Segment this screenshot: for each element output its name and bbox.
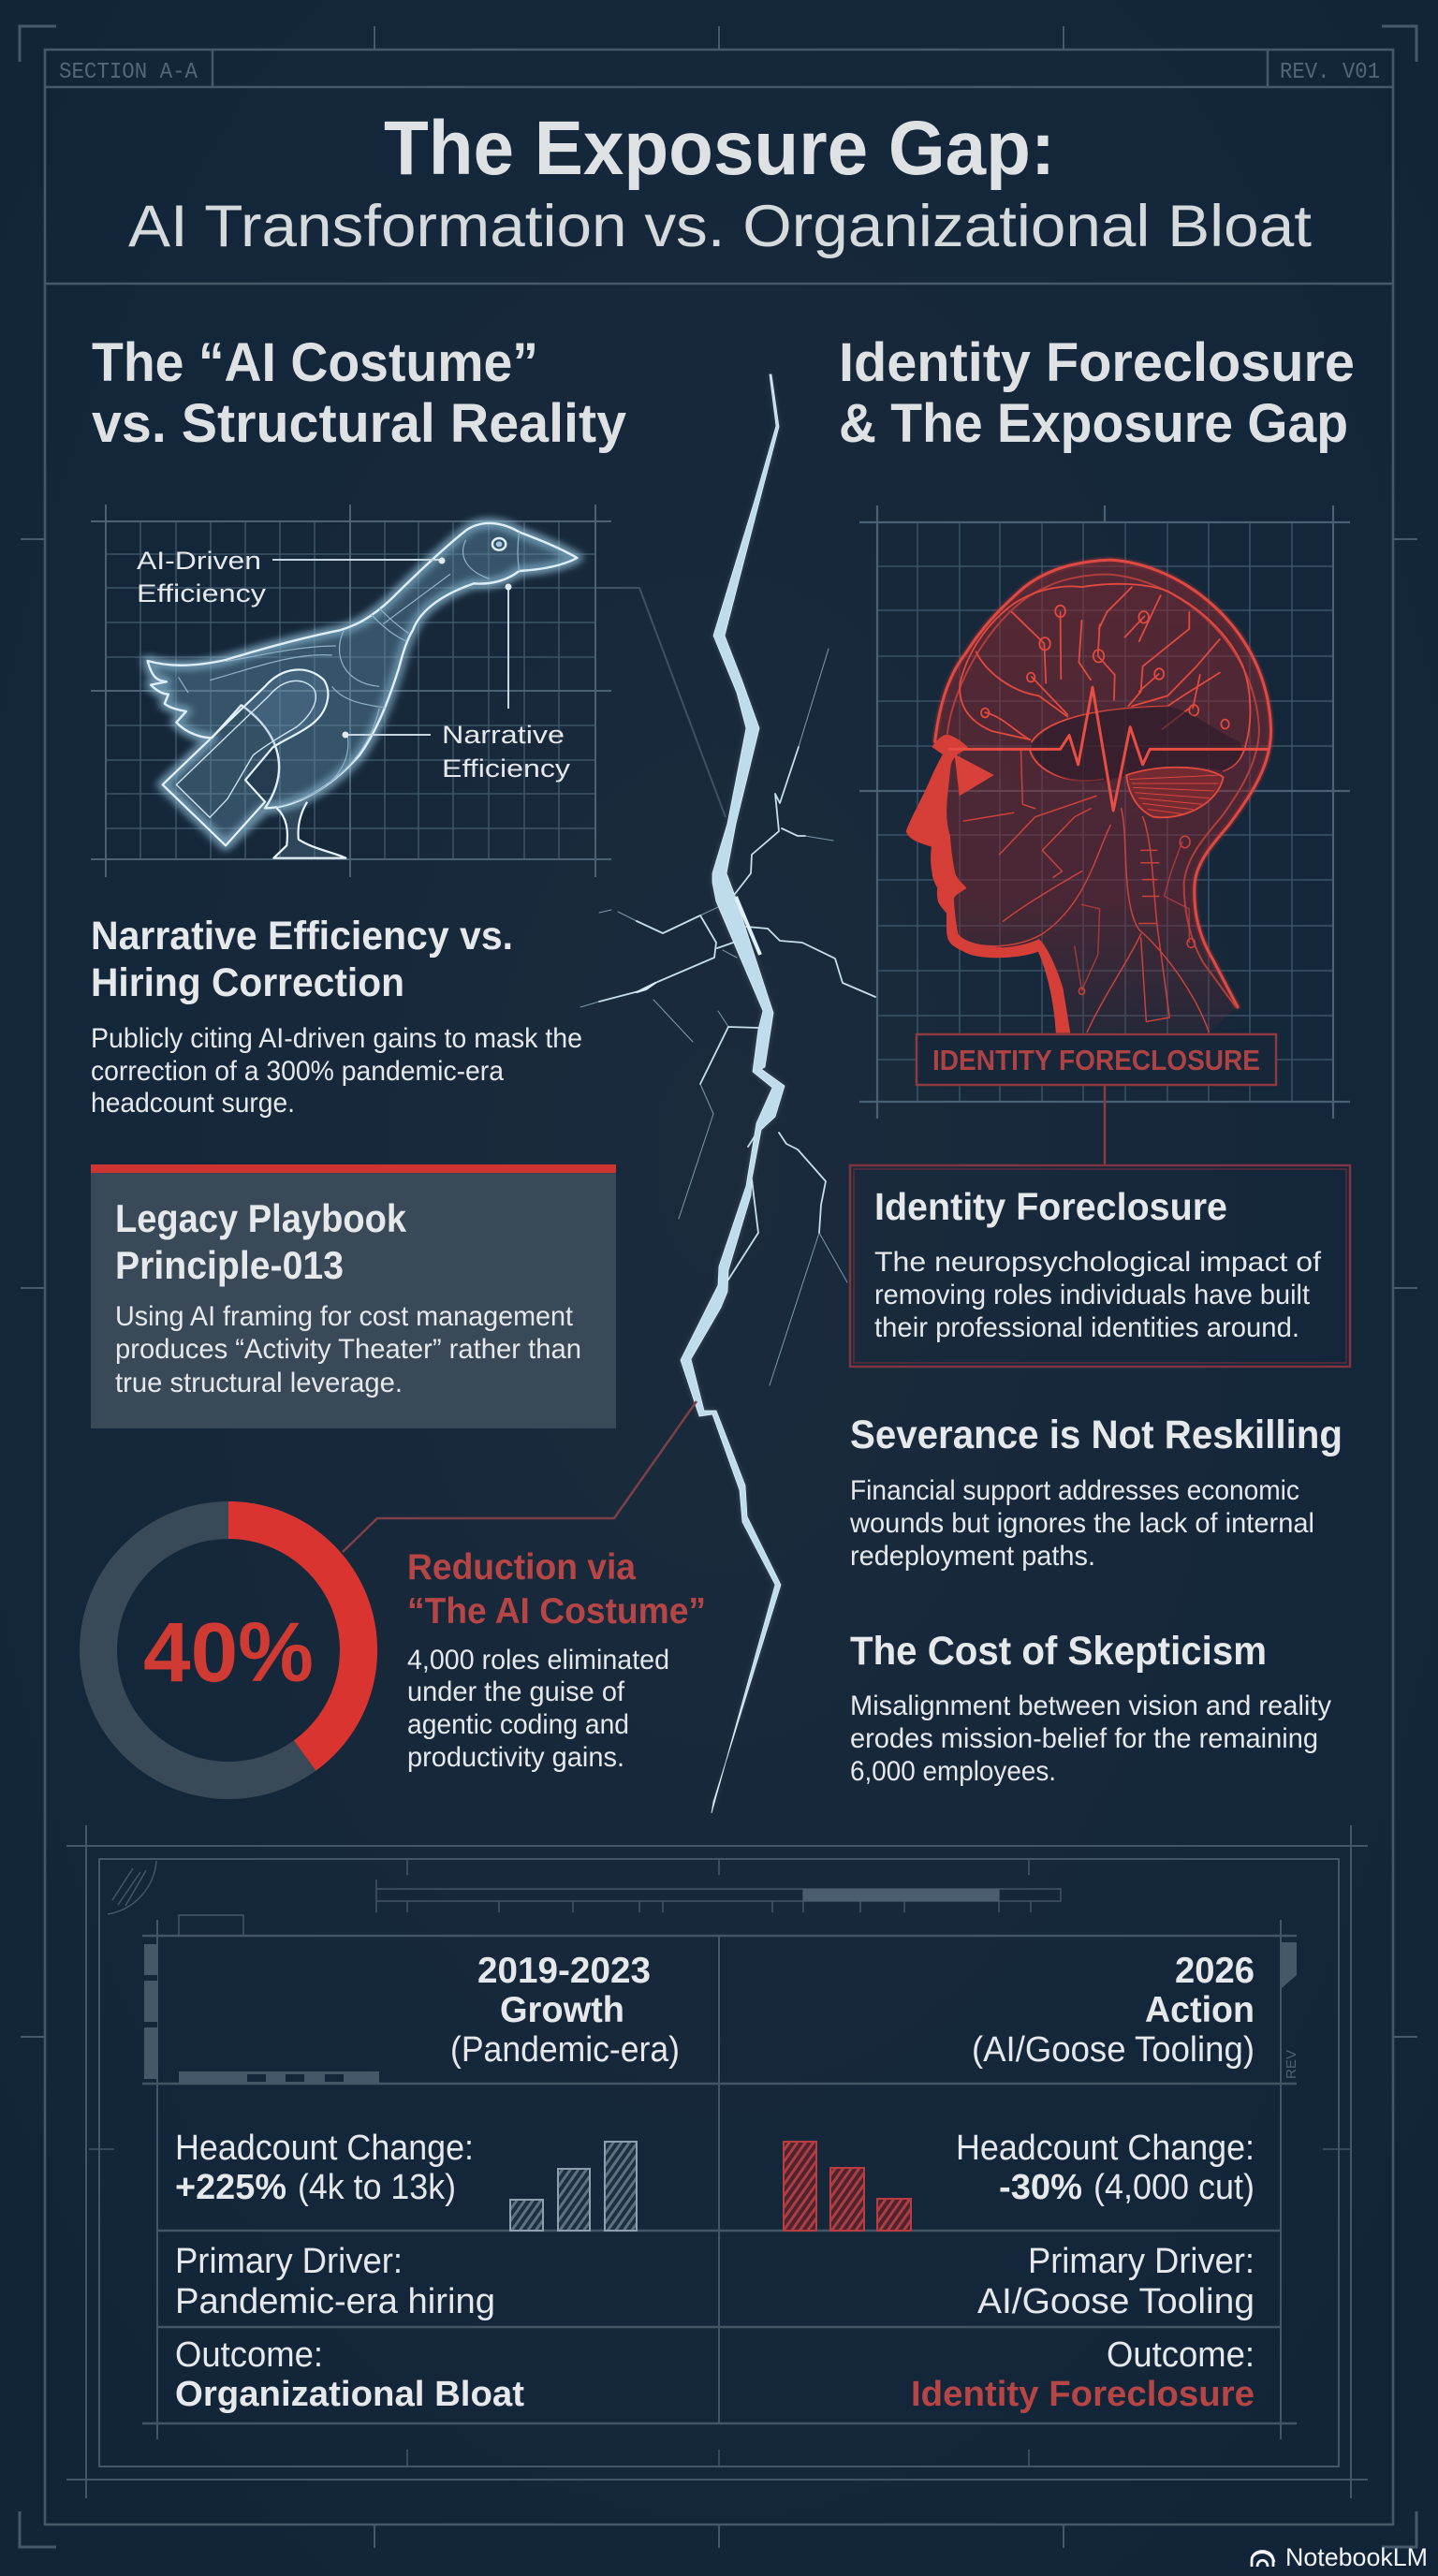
text block: narrative efficiency: correction of a 300% pandemic-era xyxy=(91,1056,504,1087)
goose blueprint diagram xyxy=(91,505,611,877)
text block: the cost of skepticism: The Cost of Skepticism xyxy=(850,1629,1267,1674)
row: primary driver right xyxy=(977,2242,1255,2321)
text block: reduction via the AI costume: 4,000 roles eliminated xyxy=(407,1645,669,1676)
text block: the cost of skepticism: erodes mission-belief for the remaining xyxy=(850,1723,1318,1754)
title: The Exposure Gap: xyxy=(384,106,1055,191)
margin label: REV xyxy=(1284,2050,1299,2079)
panel: identity foreclosure: their professional identities around. xyxy=(874,1312,1299,1343)
text block: severance is not reskilling: Severance is Not Reskilling xyxy=(850,1412,1343,1457)
panel: identity foreclosure: Identity Foreclosure xyxy=(874,1185,1227,1228)
left section heading: The “AI Costume” xyxy=(92,332,538,393)
icon: red head with brain circuit xyxy=(907,560,1271,1032)
text block: reduction via the AI costume: productivity gains. xyxy=(407,1742,624,1773)
crack branches xyxy=(580,649,875,1385)
row: headcount change right: (4,000 cut) xyxy=(1093,2168,1255,2207)
table blueprint frame xyxy=(66,1825,1368,2548)
row: primary driver right: AI/Goose Tooling xyxy=(977,2282,1255,2321)
column header: 2019-2023 growth: (Pandemic-era) xyxy=(450,2030,680,2070)
panel: legacy playbook xyxy=(91,1164,616,1428)
text block: severance is not reskilling: Financial support addresses economic xyxy=(850,1475,1299,1506)
row: primary driver left: Primary Driver: xyxy=(175,2242,403,2281)
row: outcome left xyxy=(175,2335,524,2414)
bar chart: reduction xyxy=(784,2142,911,2231)
text block: narrative efficiency: headcount surge. xyxy=(91,1088,295,1119)
row: outcome right: Outcome: xyxy=(1107,2335,1255,2375)
label: identity foreclosure: IDENTITY FORECLOSURE xyxy=(932,1044,1260,1076)
row: primary driver right: Primary Driver: xyxy=(1028,2242,1255,2281)
text block: reduction via the AI costume: agentic coding and xyxy=(407,1709,629,1740)
text block: narrative efficiency: Hiring Correction xyxy=(91,960,404,1005)
text block: severance is not reskilling: wounds but ignores the lack of internal xyxy=(849,1508,1314,1539)
head grid xyxy=(859,505,1350,1119)
panel: legacy playbook: Using AI framing for cost management xyxy=(115,1301,574,1332)
comparison table xyxy=(66,1825,1368,2548)
callout lines xyxy=(272,558,511,738)
row: headcount change right: Headcount Change: xyxy=(956,2129,1255,2168)
panel: legacy playbook: true structural leverage. xyxy=(115,1368,403,1398)
left section heading: vs. Structural Reality xyxy=(92,393,626,454)
text block: the cost of skepticism: 6,000 employees. xyxy=(850,1756,1056,1787)
row: headcount change right: -30% xyxy=(999,2168,1082,2207)
icon: goose in magnet costume xyxy=(148,523,577,858)
title: AI Transformation vs. Organizational Bloat xyxy=(128,194,1313,259)
row: primary driver left: Pandemic-era hiring xyxy=(175,2282,495,2321)
donut chart: 40 percent: 40% xyxy=(143,1606,314,1700)
text block: the cost of skepticism xyxy=(850,1629,1331,1787)
left section heading xyxy=(92,332,626,454)
row: headcount change left: (4k to 13k) xyxy=(298,2168,456,2207)
row: outcome left: Organizational Bloat xyxy=(175,2375,524,2414)
row: headcount change left: +225% xyxy=(175,2168,286,2207)
goose grid xyxy=(91,505,611,877)
text block: reduction via the AI costume: Reduction via xyxy=(407,1547,636,1588)
right section heading xyxy=(839,332,1355,454)
label: AI-Driven Efficiency: Efficiency xyxy=(137,579,267,607)
row: headcount change left xyxy=(175,2129,474,2207)
label: AI-Driven Efficiency xyxy=(137,547,267,607)
text block: the cost of skepticism: Misalignment between vision and reality xyxy=(850,1690,1331,1721)
NotebookLM logo: NotebookLM xyxy=(1285,2543,1428,2571)
text block: reduction via the AI costume xyxy=(407,1547,706,1773)
row: outcome left: Outcome: xyxy=(175,2335,323,2375)
text block: severance is not reskilling xyxy=(849,1412,1343,1572)
head diagram xyxy=(859,505,1350,1165)
column header: 2026 action xyxy=(972,1951,1255,2070)
right section heading: Identity Foreclosure xyxy=(839,332,1355,393)
right section heading: & The Exposure Gap xyxy=(839,393,1348,454)
section tag: SECTION A-A xyxy=(59,60,198,85)
text block: narrative efficiency: Narrative Efficiency vs. xyxy=(91,914,513,959)
label: Narrative Efficiency: Efficiency xyxy=(442,754,571,783)
text block: narrative efficiency: Publicly citing AI-driven gains to mask the xyxy=(91,1023,582,1054)
row: headcount change left: Headcount Change: xyxy=(175,2129,474,2168)
icon: notebook arcs xyxy=(1252,2552,1274,2567)
bar chart: growth xyxy=(510,2142,637,2231)
label: Narrative Efficiency: Narrative xyxy=(442,721,565,749)
panel: legacy playbook: produces “Activity Theater” rather than xyxy=(115,1334,581,1365)
column header: 2026 action: 2026 xyxy=(1175,1951,1255,1991)
text block: reduction via the AI costume: “The AI Costume” xyxy=(407,1591,706,1632)
column header: 2019-2023 growth xyxy=(450,1951,680,2070)
text block: reduction via the AI costume: under the guise of xyxy=(407,1676,625,1707)
title xyxy=(128,106,1313,259)
column header: 2019-2023 growth: Growth xyxy=(500,1990,624,2030)
panel: legacy playbook: Legacy Playbook xyxy=(115,1196,407,1240)
row: headcount change right xyxy=(956,2129,1255,2207)
panel: identity foreclosure: The neuropsychological impact of xyxy=(874,1247,1322,1278)
panel: identity foreclosure: removing roles individuals have built xyxy=(874,1280,1311,1310)
column header: 2019-2023 growth: 2019-2023 xyxy=(477,1951,651,1991)
panel: identity foreclosure xyxy=(850,1165,1350,1367)
row: outcome right: Identity Foreclosure xyxy=(911,2375,1255,2414)
connector line: donut to crack xyxy=(343,1401,697,1552)
revision tag: REV. V01 xyxy=(1280,60,1380,85)
label: Narrative Efficiency xyxy=(442,721,571,783)
label: AI-Driven Efficiency: AI-Driven xyxy=(137,547,261,575)
donut chart: 40 percent xyxy=(98,1520,359,1780)
crack divider xyxy=(580,374,875,1813)
panel: legacy playbook: Principle-013 xyxy=(115,1243,344,1287)
label: identity foreclosure xyxy=(917,1034,1276,1085)
column header: 2026 action: (AI/Goose Tooling) xyxy=(972,2030,1255,2070)
main crack xyxy=(681,374,785,1813)
text block: narrative efficiency xyxy=(91,914,582,1119)
row: primary driver left xyxy=(175,2242,495,2321)
column header: 2026 action: Action xyxy=(1145,1990,1255,2030)
row: outcome right xyxy=(911,2335,1255,2414)
text block: severance is not reskilling: redeployment paths. xyxy=(850,1541,1095,1572)
